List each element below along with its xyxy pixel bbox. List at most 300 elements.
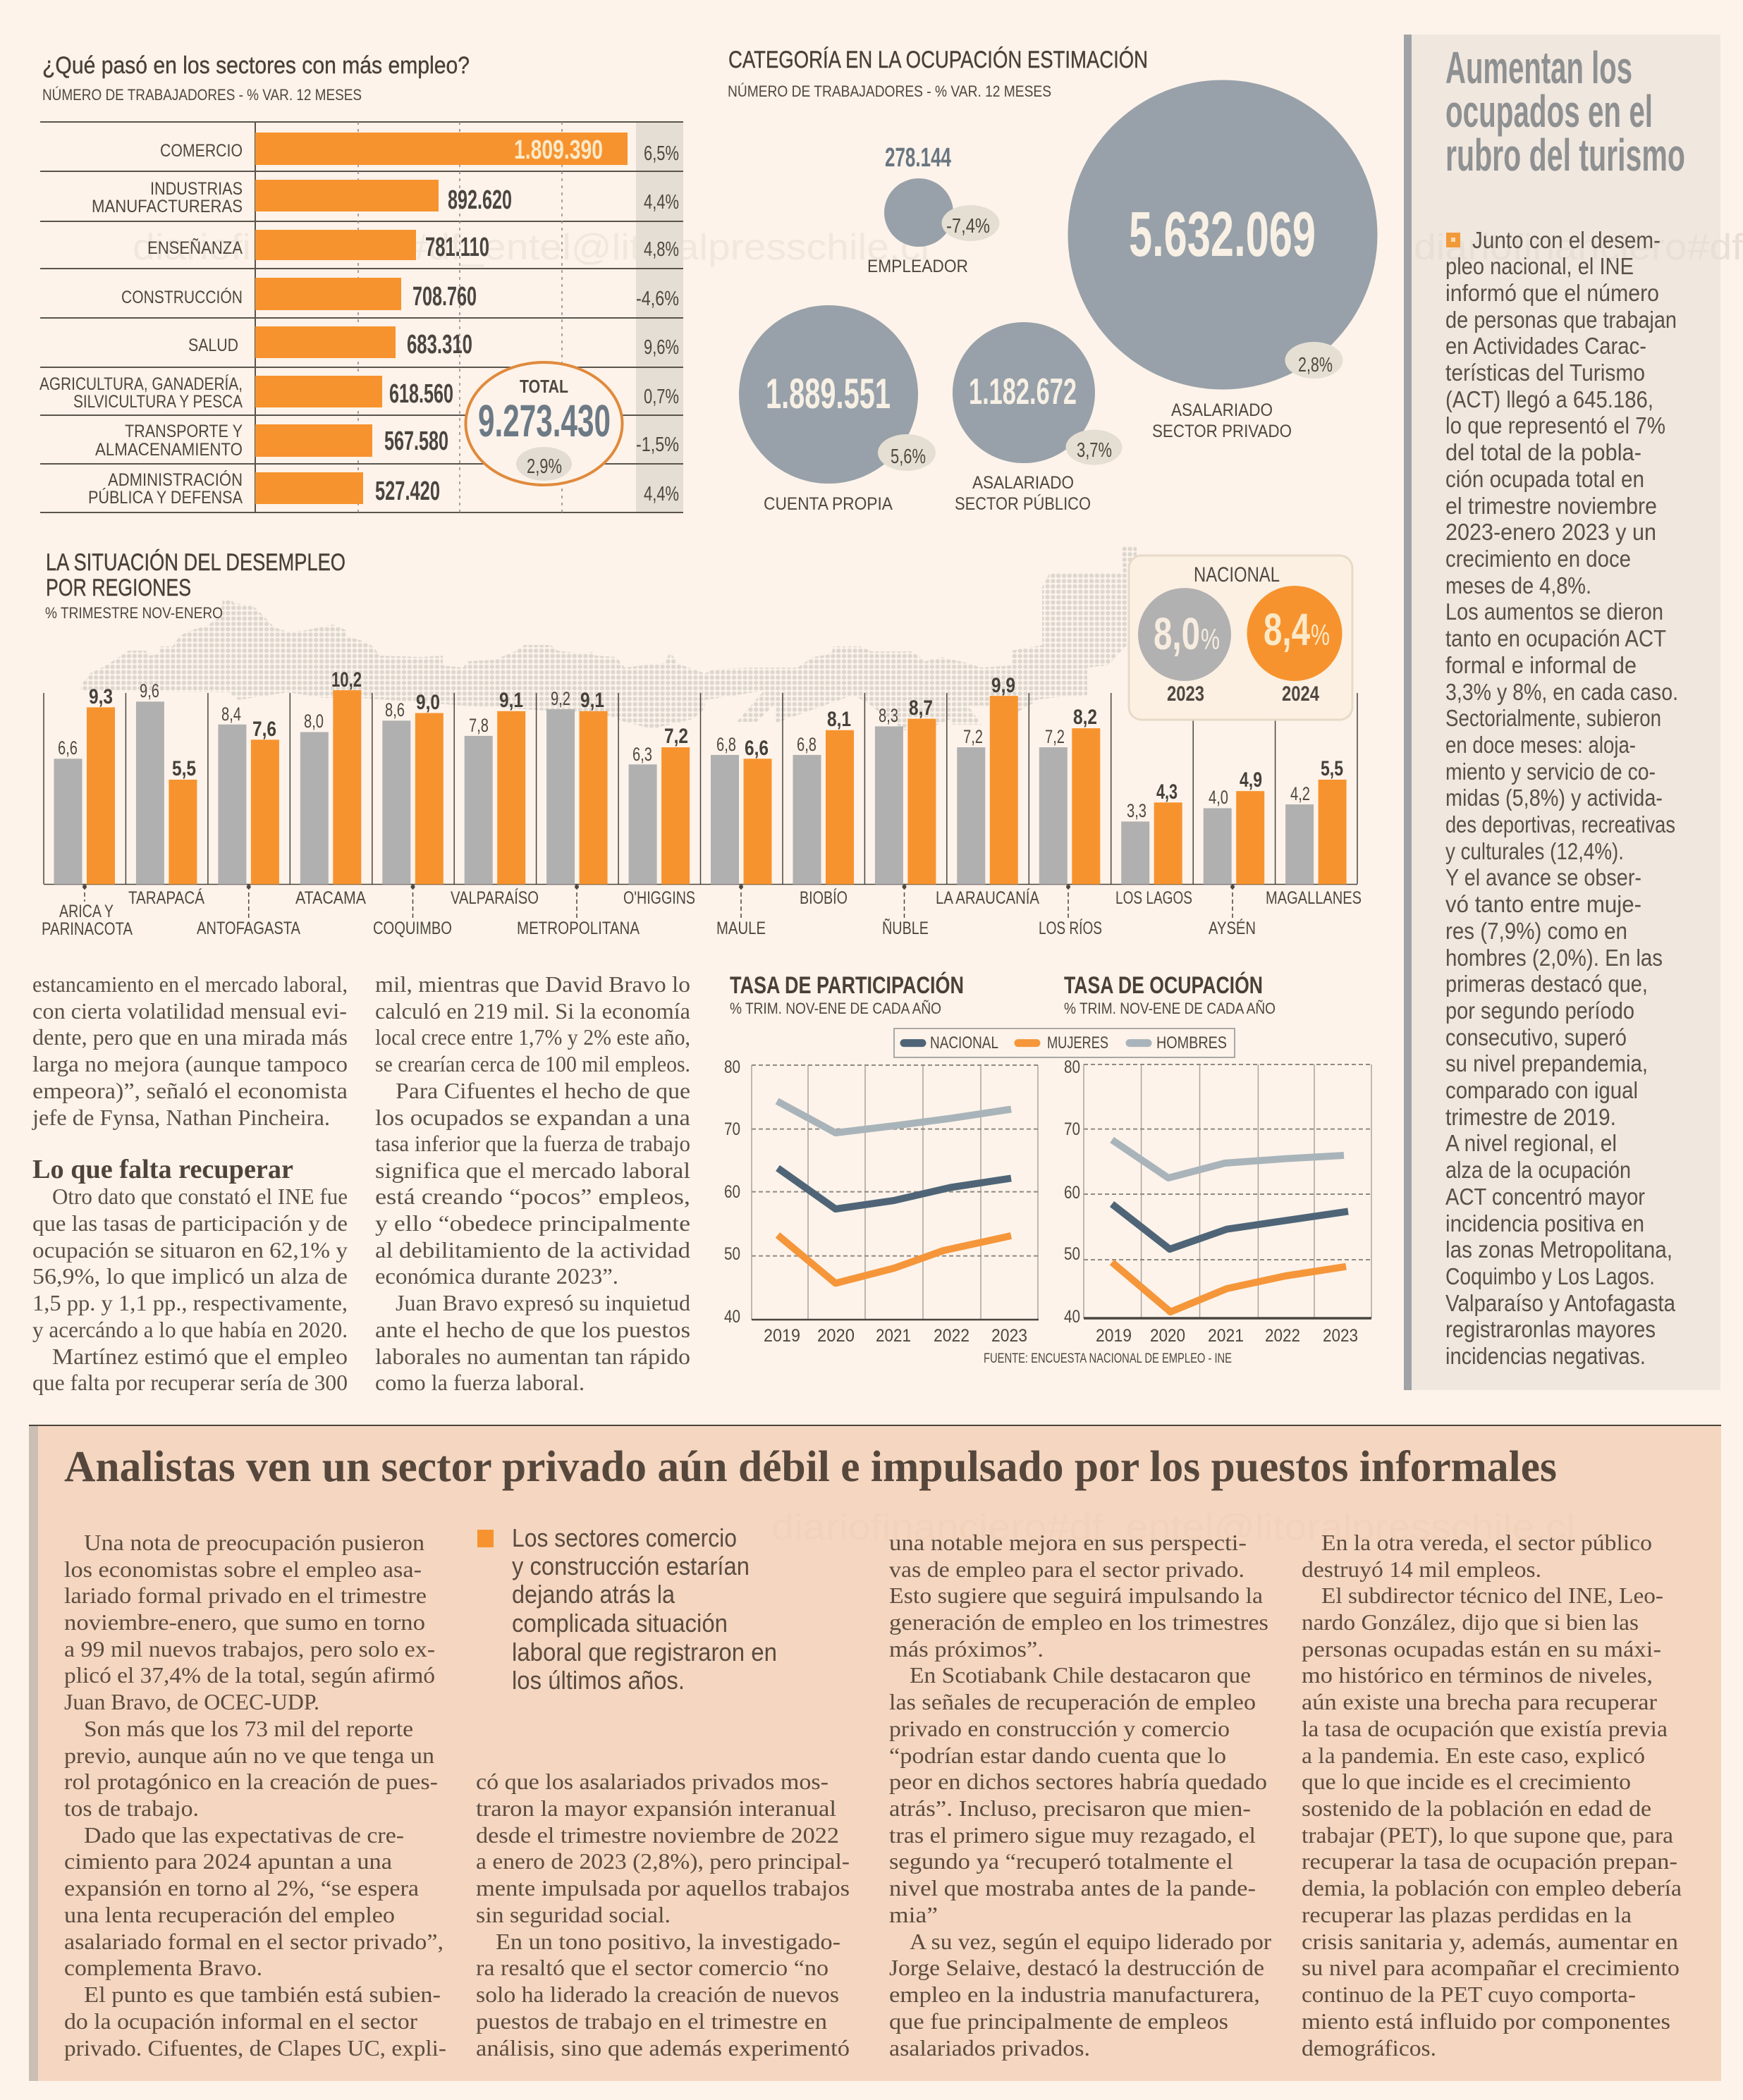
article column 1: noviembre-enero, que sumo en torno — [64, 1609, 425, 1635]
article column 4: miento está influido por componentes — [1302, 2008, 1670, 2034]
watermark text: diariofinanciero#df_entel@litoralpresschile.cl — [133, 227, 929, 268]
panel: unemployment by region — [42, 546, 1362, 939]
text block: article columns upper left: jefe de Fynsa, Nathan Pincheira. — [32, 1105, 330, 1130]
sidebar text: tanto en ocupación ACT — [1445, 625, 1666, 651]
article column 2: a enero de 2023 (2,8%), pero principal- — [476, 1848, 850, 1874]
bar values: 708.760 — [412, 282, 477, 312]
region labels: AYSÉN — [1209, 918, 1256, 938]
article column 1: El punto es que también está subien- — [84, 1982, 441, 2007]
sidebar text: por segundo período — [1445, 997, 1634, 1024]
orange bar values: 8,7 — [909, 696, 933, 720]
dotted map of Chile — [81, 546, 1137, 734]
region labels: TARAPACÁ — [128, 888, 204, 908]
line chart: tasa de ocupacion: 2020 — [1150, 1326, 1185, 1346]
sidebar text: y culturales (12,4%). — [1445, 838, 1624, 864]
sidebar text: primeras destacó que, — [1445, 971, 1648, 997]
pull quote: complicada situación — [512, 1609, 728, 1638]
bar values: 1.809.390 — [514, 135, 603, 165]
sidebar text: Sectorialmente, subieron — [1445, 705, 1661, 731]
sidebar text: Junto con el desem- — [1472, 227, 1661, 253]
article column 2: puestos de trabajo en el trimestre en — [476, 2008, 827, 2034]
region labels: LA ARAUCANÍA — [936, 888, 1039, 908]
subheading: unemployment: % TRIMESTRE NOV-ENERO — [45, 604, 223, 622]
callout: nacional: 8,4 — [1264, 604, 1310, 655]
subheading: lo que falta recuperar: Lo que falta recuperar — [32, 1155, 293, 1184]
orange bars 2024 — [87, 690, 1347, 884]
heading: unemployment: LA SITUACIÓN DEL DESEMPLEO — [46, 549, 345, 576]
text block: article columns upper left: y ello “obedece principalmente — [375, 1210, 690, 1236]
text block: article columns upper left: significa que el mercado laboral — [375, 1158, 690, 1183]
article column 4: sostenido de la población en edad de — [1302, 1795, 1651, 1821]
orange bar values: 8,1 — [827, 708, 851, 731]
sidebar text: Valparaíso y Antofagasta — [1445, 1290, 1676, 1316]
grey bar values: 8,6 — [385, 699, 405, 720]
sidebar text: lo que representó el 7% — [1445, 412, 1665, 438]
grey bar values: 8,0 — [304, 711, 324, 732]
region labels: BIOBÍO — [800, 888, 848, 908]
region label leaders — [82, 885, 1235, 918]
region labels: ANTOFAGASTA — [197, 919, 300, 938]
article column 2: desde el trimestre noviembre de 2022 — [476, 1822, 839, 1848]
grey bar values: 6,6 — [58, 737, 78, 759]
sidebar text: alza de la ocupación — [1445, 1157, 1631, 1183]
source note: FUENTE: ENCUESTA NACIONAL DE EMPLEO - INE — [984, 1351, 1232, 1366]
orange bar values: 7,6 — [252, 718, 276, 741]
callout: nacional: 2023 — [1167, 682, 1204, 706]
variation percentages: 0,7% — [644, 386, 679, 408]
sidebar text: Y el avance se obser- — [1445, 864, 1641, 890]
article column 1: do la ocupación informal en el sector — [64, 2008, 417, 2034]
variation percentages: 4,8% — [644, 238, 679, 261]
panel: bottom article background — [29, 1425, 1721, 2081]
sidebar text: las zonas Metropolitana, — [1445, 1236, 1672, 1263]
sidebar text: pleo nacional, el INE — [1445, 253, 1634, 279]
region labels: VALPARAÍSO — [451, 888, 539, 908]
article column 1: complementa Bravo. — [64, 1955, 262, 1980]
text block: article columns upper left: 56,9%, lo que implicó un alza de — [32, 1263, 348, 1289]
text block: article columns upper left: local crece entre 1,7% y 2% este año, — [375, 1024, 690, 1050]
bar values: 892.620 — [448, 185, 512, 215]
watermark text: diariofinanciero#df_entel@litoralpresschile.cl — [771, 1507, 1575, 1548]
article column 4: aún existe una brecha para recuperar — [1302, 1689, 1657, 1714]
text block: article columns upper left: Martínez estimó que el empleo — [52, 1344, 348, 1369]
bar values: 618.560 — [389, 379, 453, 409]
article column 3: atrás”. Incluso, precisaron que mien- — [889, 1795, 1251, 1821]
article column 4: personas ocupadas están en su máxi- — [1302, 1636, 1661, 1662]
article column 2: solo ha liderado la creación de nuevos — [476, 1982, 839, 2007]
heading: tasa de participacion — [730, 972, 964, 1017]
text block: article columns upper left: laborales no aumentan tan rápido — [375, 1344, 690, 1369]
region dividers and baseline — [44, 693, 1357, 884]
region labels: ATACAMA — [295, 888, 366, 908]
pull quote: y construcción estarían — [512, 1552, 750, 1580]
icon: pull quote square — [477, 1530, 494, 1547]
article column 3: una notable mejora en sus perspecti- — [889, 1530, 1247, 1555]
bubble: empleador: -7,4% — [946, 215, 990, 238]
sector labels: ENSEÑANZA — [147, 238, 243, 258]
article column 1: expansión en torno al 2%, “se espera — [64, 1875, 419, 1901]
article column 4: En la otra vereda, el sector público — [1321, 1530, 1652, 1555]
bubble: empleador: 278.144 — [885, 143, 951, 173]
bubble: asalariado sector publico: 1.182.672 — [969, 372, 1077, 412]
sector labels — [39, 141, 243, 508]
article column 4: demia, la población con empleo debería — [1302, 1875, 1682, 1901]
article column 3: privado en construcción y comercio — [889, 1716, 1230, 1741]
bar values: 683.310 — [407, 330, 472, 360]
article column 3 — [889, 1530, 1271, 2061]
grey bar values: 9,2 — [551, 688, 570, 709]
sidebar text: (ACT) llegó a 645.186, — [1445, 386, 1653, 412]
orange bar values: 4,3 — [1156, 780, 1178, 804]
sidebar text: midas (5,8%) y activida- — [1445, 785, 1663, 811]
sidebar text: consecutivo, superó — [1445, 1024, 1627, 1050]
bubble: asalariado sector privado: ASALARIADO — [1171, 400, 1273, 420]
heading: tasa de participacion: % TRIM. NOV-ENE DE CADA AÑO — [730, 1000, 941, 1017]
text block: article columns upper left: está creando “pocos” empleos, — [375, 1184, 690, 1209]
text block: article columns upper left: los ocupados se expandan a una — [375, 1105, 690, 1130]
pull quote: laboral que registraron en — [512, 1638, 777, 1666]
sidebar text: informó que el número — [1445, 280, 1659, 306]
article column 4: recuperar las plazas perdidas en la — [1302, 1902, 1632, 1927]
article column 1: plicó el 37,4% de la total, según afirmó — [64, 1662, 435, 1688]
article column 3: que fue principalmente de empleos — [889, 2008, 1228, 2034]
sector labels: MANUFACTURERAS — [92, 197, 243, 216]
line chart: tasa de ocupacion: 40 — [1064, 1307, 1080, 1327]
article column 3: mia” — [889, 1902, 938, 1927]
watermark text: diariofinanciero#df — [1414, 227, 1743, 268]
sector labels: TRANSPORTE Y — [125, 422, 243, 441]
text block: article columns upper left: que falta por recuperar sería de 300 — [32, 1370, 348, 1395]
sector labels: COMERCIO — [160, 141, 243, 161]
sidebar text: ción ocupada total en — [1445, 466, 1644, 492]
subheading: category: NÚMERO DE TRABAJADORES - % VAR. 12 MESES — [728, 82, 1051, 100]
article column 4 — [1302, 1530, 1682, 2061]
article column 3: empleo en la industria manufacturera, — [889, 1982, 1260, 2007]
sidebar text: incidencia positiva en — [1445, 1210, 1644, 1236]
legend: MUJERES — [1047, 1033, 1108, 1052]
article column 1: cimiento para 2024 apuntan a una — [64, 1848, 392, 1874]
article column 4: continuo de la PET cuyo comporta- — [1302, 1982, 1636, 2007]
grey bar values: 6,8 — [797, 734, 817, 755]
line chart: tasa de participacion: 2020 — [817, 1326, 855, 1346]
callout: nacional: 2024 — [1282, 682, 1319, 706]
grey bar values: 8,3 — [879, 705, 898, 726]
article column 2: traron la mayor expansión interanual — [476, 1795, 836, 1821]
text block: article columns upper left: económica durante 2023”. — [375, 1263, 618, 1289]
pull quote: dejando atrás la — [512, 1580, 675, 1609]
sector labels: INDUSTRIAS — [150, 179, 243, 199]
line chart: tasa de participacion: 2021 — [876, 1326, 911, 1346]
article column 3: tras el primero sigue muy rezagado, el — [889, 1822, 1256, 1848]
bar values: 567.580 — [384, 426, 448, 456]
line chart: tasa de ocupacion: 2021 — [1208, 1326, 1244, 1346]
bubble: cuenta propia: 5,6% — [891, 446, 926, 468]
sidebar text: res (7,9%) como en — [1445, 918, 1627, 944]
sidebar text: A nivel regional, el — [1445, 1130, 1617, 1156]
sidebar text: en Actividades Carac- — [1445, 333, 1646, 359]
line chart: tasa de participacion: 2022 — [934, 1326, 970, 1346]
variation percentages: 6,5% — [644, 142, 679, 165]
article column 2: mente impulsada por aquellos trabajos — [476, 1875, 850, 1901]
article column 2: có que los asalariados privados mos- — [476, 1769, 828, 1794]
article column 1: asalariado formal en el sector privado”, — [64, 1929, 444, 1954]
article column 4: a la pandemia. En este caso, explicó — [1302, 1743, 1645, 1768]
callout: total — [465, 362, 622, 485]
article column 3: A su vez, según el equipo liderado por — [910, 1929, 1271, 1954]
bottom article — [64, 1443, 1682, 2061]
line chart: tasa de ocupacion — [1064, 1057, 1371, 1346]
orange bar values — [89, 668, 1343, 804]
variation column background — [636, 122, 683, 512]
sidebar text: el trimestre noviembre — [1445, 493, 1657, 519]
sidebar text: en doce meses: aloja- — [1445, 732, 1636, 758]
chart grid — [40, 122, 683, 512]
orange bar values: 10,2 — [331, 668, 362, 692]
sector labels: ADMINISTRACIÓN — [108, 469, 243, 490]
grey bar values: 6,3 — [632, 744, 652, 765]
panel: tourism sidebar background — [1404, 35, 1720, 1390]
text block: article columns upper left: Otro dato que constató el INE fue — [52, 1184, 348, 1209]
region labels — [42, 888, 1362, 939]
article column 2: ra resaltó que el sector comercio “no — [476, 1955, 828, 1980]
article column 1: rol protagónico en la creación de pues- — [64, 1769, 438, 1794]
heading: tasa de ocupacion — [1064, 972, 1276, 1017]
sidebar text: Los aumentos se dieron — [1445, 598, 1663, 625]
article column 3: las señales de recuperación de empleo — [889, 1689, 1256, 1714]
article column 1 — [64, 1530, 446, 2061]
callout: nacional — [1129, 555, 1352, 720]
article column 1: Son más que los 73 mil del reporte — [84, 1716, 413, 1741]
line chart: tasa de participacion: 2019 — [764, 1326, 800, 1346]
line chart: tasa de participacion: 80 — [724, 1057, 740, 1077]
article column 2 — [476, 1769, 850, 2061]
article column 1: a 99 mil nuevos trabajos, pero solo ex- — [64, 1636, 435, 1662]
article column 3: vas de empleo para el sector privado. — [889, 1556, 1244, 1582]
sector labels: PÚBLICA Y DEFENSA — [88, 487, 243, 508]
grey bar values: 7,2 — [1045, 726, 1065, 747]
article column 1: Juan Bravo, de OCEC-UDP. — [64, 1689, 319, 1714]
bar values: 527.420 — [375, 477, 440, 506]
grey bar values: 4,2 — [1290, 783, 1310, 804]
sidebar heading — [1445, 42, 1685, 180]
line chart: tasa de ocupacion: 2019 — [1096, 1326, 1132, 1346]
variation percentages — [636, 142, 679, 505]
text block: article columns upper left: calculó en 219 mil. Si la economía — [375, 998, 690, 1024]
line chart: tasa de ocupacion: 2022 — [1265, 1326, 1300, 1346]
text block: article columns upper left — [32, 971, 690, 1395]
grey bar values: 7,2 — [963, 726, 983, 747]
line chart: tasa de participacion: 50 — [724, 1244, 740, 1264]
pull quote — [512, 1523, 777, 1695]
orange bar values: 6,6 — [745, 737, 769, 760]
article column 3: asalariados privados. — [889, 2035, 1090, 2061]
watermark text — [133, 227, 1743, 1548]
article column 2: sin seguridad social. — [476, 1902, 671, 1927]
article column 3: más próximos”. — [889, 1636, 1044, 1662]
sector labels: AGRICULTURA, GANADERÍA, — [39, 374, 243, 394]
sidebar text: trimestre de 2019. — [1445, 1104, 1616, 1130]
sidebar text — [1445, 227, 1678, 1369]
sidebar text: comparado con igual — [1445, 1077, 1638, 1103]
sidebar text: incidencias negativas. — [1445, 1343, 1646, 1369]
orange bar values: 5,5 — [172, 757, 196, 780]
bubble: asalariado sector privado — [1068, 80, 1378, 441]
line chart: tasa de participacion: 70 — [724, 1119, 740, 1139]
line chart: tasa de participacion — [724, 1057, 1039, 1346]
article column 4: recuperar la tasa de ocupación prepan- — [1302, 1848, 1677, 1874]
callout: nacional: NACIONAL — [1194, 563, 1280, 587]
article column 4: demográficos. — [1302, 2035, 1436, 2061]
orange bar values: 7,2 — [664, 725, 688, 748]
article column 3: En Scotiabank Chile destacaron que — [910, 1662, 1251, 1688]
sidebar: tourism story — [1445, 42, 1685, 1369]
sector labels: SALUD — [188, 336, 238, 355]
sidebar heading: Aumentan los — [1445, 42, 1632, 93]
subheading: sectors: NÚMERO DE TRABAJADORES - % VAR. 12 MESES — [42, 86, 362, 104]
sidebar text: Coquimbo y Los Lagos. — [1445, 1263, 1655, 1289]
line chart: tasa de ocupacion: 70 — [1064, 1119, 1080, 1139]
region labels: ÑUBLE — [882, 918, 929, 938]
bubble: asalariado sector publico: 3,7% — [1077, 439, 1112, 462]
region labels: ARICA Y — [59, 902, 114, 921]
callout: nacional: % — [1201, 622, 1220, 656]
line chart: tasa de ocupacion: 80 — [1064, 1057, 1080, 1077]
bubble: empleador — [867, 143, 1000, 276]
article column 3: nivel que mostraba antes de la pande- — [889, 1875, 1256, 1901]
region labels: METROPOLITANA — [517, 919, 640, 938]
grey bar values: 9,6 — [140, 680, 159, 701]
pull quote: los últimos años. — [512, 1666, 685, 1695]
article column 3: segundo ya “recuperó totalmente el — [889, 1848, 1233, 1874]
heading: tasa de ocupacion: % TRIM. NOV-ENE DE CADA AÑO — [1064, 1000, 1276, 1017]
grey bars 2023 — [54, 701, 1314, 884]
sidebar text: vó tanto entre muje- — [1445, 891, 1641, 917]
panel: occupation category bubbles — [728, 47, 1378, 514]
text block: article columns upper left: Juan Bravo expresó su inquietud — [396, 1290, 690, 1315]
line chart: tasa de ocupacion: 50 — [1064, 1244, 1080, 1264]
article column 4: su nivel para acompañar el crecimiento — [1302, 1955, 1680, 1980]
article column 4: crisis sanitaria y, además, aumentar en — [1302, 1929, 1678, 1954]
sector labels: ALMACENAMIENTO — [95, 440, 243, 460]
line chart: tasa de ocupacion: 2023 — [1323, 1326, 1358, 1346]
variation percentages: 4,4% — [644, 191, 679, 214]
bubble: asalariado sector publico: ASALARIADO — [972, 473, 1074, 493]
sidebar text: hombres (2,0%). En las — [1445, 945, 1663, 971]
icon: orange bullet — [1446, 233, 1460, 247]
heading: tasa de ocupacion: TASA DE OCUPACIÓN — [1064, 972, 1263, 999]
region labels: COQUIMBO — [373, 919, 452, 938]
text block: article columns upper left: empeora)”, señaló el economista — [32, 1078, 348, 1103]
bubble: cuenta propia: CUENTA PROPIA — [764, 494, 893, 514]
line chart: tasa de participacion: 40 — [724, 1307, 740, 1327]
legend — [894, 1028, 1235, 1057]
article column 3: peor en dichos sectores habría quedado — [889, 1769, 1267, 1794]
orange bar values: 9,9 — [991, 674, 1015, 697]
orange bar values: 8,2 — [1073, 706, 1097, 729]
article column 1: tos de trabajo. — [64, 1795, 199, 1821]
article column 1: privado. Cifuentes, de Clapes UC, expli- — [64, 2035, 446, 2061]
bubble: asalariado sector publico: SECTOR PÚBLICO — [955, 493, 1091, 514]
region labels: O'HIGGINS — [623, 888, 695, 908]
heading: sectors: ¿Qué pasó en los sectores con más empleo? — [42, 52, 470, 79]
text block: article columns upper left: que las tasas de participación y de — [32, 1210, 348, 1236]
region labels: LOS RÍOS — [1039, 918, 1102, 938]
sidebar text: 3,3% y 8%, en cada caso. — [1445, 679, 1678, 705]
orange bar values: 9,3 — [89, 685, 113, 708]
grey bar values: 6,8 — [716, 734, 736, 755]
text block: article columns upper left: ante el hecho de que los puestos — [375, 1317, 690, 1342]
article column 1: Dado que las expectativas de cre- — [84, 1822, 404, 1848]
legend: HOMBRES — [1156, 1033, 1227, 1052]
sidebar text: ACT concentró mayor — [1445, 1184, 1645, 1210]
sidebar text: de personas que trabajan — [1445, 307, 1677, 333]
sidebar text: formal e informal de — [1445, 652, 1637, 678]
text block: article columns upper left: mil, mientras que David Bravo lo — [375, 971, 690, 997]
text block: article columns upper left: estancamiento en el mercado laboral, — [32, 971, 348, 997]
line chart: tasa de participacion: 2023 — [991, 1326, 1027, 1346]
text block: article columns upper left: y acercándo a lo que había en 2020. — [32, 1317, 348, 1342]
heading: tasa de participacion: TASA DE PARTICIPACIÓN — [730, 972, 964, 999]
bubble: asalariado sector publico — [953, 322, 1123, 514]
text block: article columns upper left: se crearían cerca de 100 mil empleos. — [375, 1051, 690, 1076]
article column 3: Esto sugiere que seguirá impulsando la — [889, 1583, 1263, 1608]
orange bar values: 9,0 — [416, 691, 440, 714]
article column 4: trabajar (PET), lo que supone que, para — [1302, 1822, 1673, 1848]
sidebar text: registraronlas mayores — [1445, 1316, 1656, 1342]
article column 4: mo histórico en términos de niveles, — [1302, 1662, 1653, 1688]
grey bar values: 7,8 — [469, 715, 489, 736]
sidebar text: terísticas del Turismo — [1445, 360, 1645, 386]
bubble: asalariado sector privado: SECTOR PRIVADO — [1152, 422, 1292, 441]
article column 1: Una nota de preocupación pusieron — [84, 1530, 424, 1555]
region labels: PARINACOTA — [42, 919, 133, 939]
variation percentages: 9,6% — [644, 336, 679, 359]
text block: article columns upper left: como la fuerza laboral. — [375, 1370, 585, 1395]
region labels: MAULE — [716, 919, 766, 938]
text block: article columns upper left: larga no mejora (aunque tampoco — [32, 1051, 348, 1076]
sidebar text: miento y servicio de co- — [1445, 759, 1656, 785]
callout: total: 9.273.430 — [478, 395, 611, 446]
grey bar values: 3,3 — [1127, 800, 1146, 821]
orange bar values: 9,1 — [580, 689, 604, 712]
article column 1: lariado formal privado en el trimestre — [64, 1583, 427, 1608]
heading: category: CATEGORÍA EN LA OCUPACIÓN ESTIMACIÓN — [728, 47, 1148, 73]
article column 4: El subdirector técnico del INE, Leo- — [1321, 1583, 1663, 1608]
region labels: LOS LAGOS — [1115, 888, 1192, 908]
article headline: Analistas ven un sector privado aún débil e impulsado por los puestos informales — [64, 1443, 1557, 1491]
heading: unemployment: POR REGIONES — [46, 575, 191, 601]
article column 1: una lenta recuperación del empleo — [64, 1902, 395, 1927]
bar values — [375, 135, 603, 506]
sidebar text: del total de la pobla- — [1445, 439, 1641, 465]
orange bar values: 9,1 — [499, 689, 523, 712]
grey bar values: 8,4 — [221, 704, 241, 725]
orange bar values: 5,5 — [1321, 757, 1343, 780]
region labels: MAGALLANES — [1266, 888, 1362, 908]
article column 4: la tasa de ocupación que existía previa — [1302, 1716, 1668, 1741]
article column 4: destruyó 14 mil empleos. — [1302, 1556, 1541, 1582]
sidebar text: meses de 4,8%. — [1445, 572, 1591, 598]
article column 1: los economistas sobre el empleo asa- — [64, 1556, 422, 1582]
callout: total: TOTAL — [520, 376, 568, 397]
bubble: asalariado sector privado: 5.632.069 — [1129, 199, 1316, 270]
article column 1: previo, aunque aún no ve que tenga un — [64, 1743, 434, 1768]
text block: article columns upper left: ocupación se situaron en 62,1% y — [32, 1237, 348, 1263]
orange bar values: 4,9 — [1240, 768, 1262, 792]
text block: article columns upper left: al debilitamiento de la actividad — [375, 1237, 690, 1263]
text block: article columns upper left: 1,5 pp. y 1,1 pp., respectivamente, — [32, 1290, 348, 1315]
panel: sectors bar chart — [39, 52, 683, 512]
